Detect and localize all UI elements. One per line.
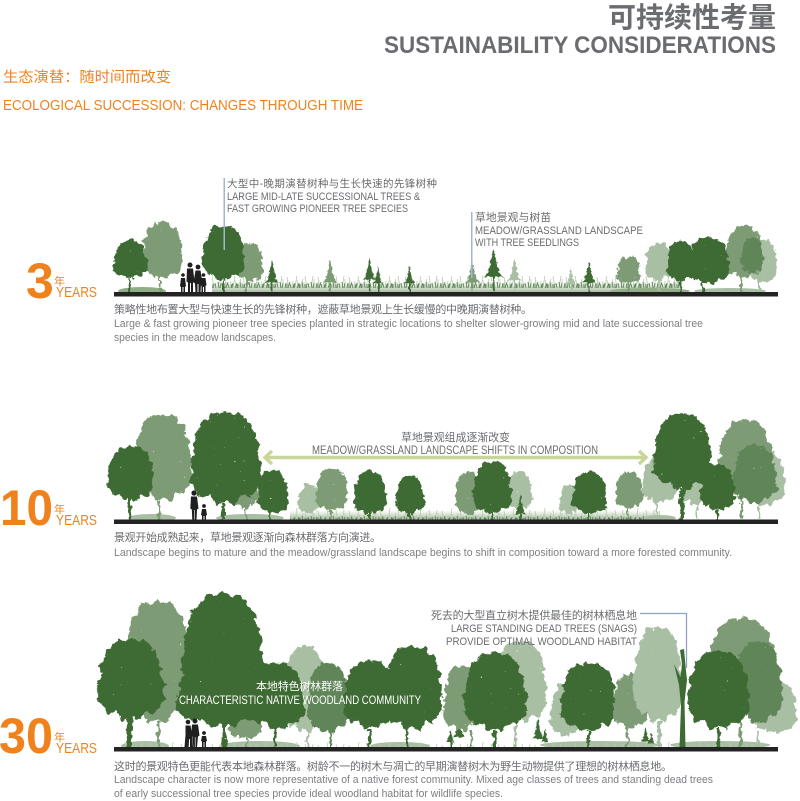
callout: meadow shift	[312, 430, 598, 457]
ground: 10 years	[114, 520, 778, 524]
year label: 10 years: YEARS	[56, 512, 97, 529]
title	[384, 2, 776, 59]
callout: standing dead trees: LARGE STANDING DEAD TREES (SNAGS)	[451, 623, 637, 635]
callout: large trees: LARGE MID-LATE SUCCESSIONAL TREES &	[227, 191, 421, 203]
caption: 30 years: 这时的景观特色更能代表本地森林群落。树龄不一的树木与凋亡的早期演替树木为野生动物提供了理想的树林栖息地。	[114, 759, 672, 773]
caption: 10 years: Landscape begins to mature and the meadow/grassland landscape begins to shift in composition toward a more forested community.	[114, 547, 732, 559]
title: 可持续性考量	[608, 2, 776, 33]
icon: dead snag tree	[674, 649, 687, 748]
callout: standing dead trees	[431, 608, 686, 668]
year label: 3 years: 年	[54, 274, 65, 288]
panel: 10 years	[0, 411, 785, 559]
trees: 30 years right cluster	[633, 617, 797, 748]
callout: native woodland: CHARACTERISTIC NATIVE WOODLAND COMMUNITY	[179, 693, 421, 707]
year label: 3 years: YEARS	[56, 284, 97, 301]
panel: 30 years	[0, 592, 797, 800]
meadow grass: 10 years	[128, 504, 676, 522]
year label: 3 years	[26, 253, 97, 309]
subtitle: ecological succession: ECOLOGICAL SUCCESSION: CHANGES THROUGH TIME	[3, 97, 363, 114]
trees: 3 years left cluster	[113, 222, 263, 293]
year label: 10 years: 年	[54, 502, 65, 516]
arrow: meadow shift	[265, 451, 646, 464]
caption: 30 years	[114, 759, 713, 800]
year label: 3 years: 3	[26, 253, 54, 309]
callout: meadow with seedlings: 草地景观与树苗	[475, 210, 551, 224]
callout: large trees: 大型中-晚期演替树种与生长快速的先锋树种	[227, 177, 437, 190]
subtitle: ecological succession: 生态演替：随时间而改变	[3, 69, 171, 86]
understory: 30 years	[120, 738, 770, 751]
callout: standing dead trees: PROVIDE OPTIMAL WOODLAND HABITAT	[446, 636, 637, 648]
year label: 10 years	[0, 480, 97, 536]
callout: meadow with seedlings: MEADOW/GRASSLAND LANDSCAPE	[475, 225, 643, 237]
title: SUSTAINABILITY CONSIDERATIONS	[384, 32, 776, 59]
trees: 10 years meadow	[298, 461, 643, 520]
people silhouette: 30 years	[184, 718, 207, 747]
callout: meadow shift: 草地景观组成逐渐改变	[401, 430, 510, 444]
year label: 30 years: 年	[54, 730, 65, 744]
year label: 10 years: 10	[0, 480, 53, 536]
meadow grass: 3 years	[118, 276, 766, 295]
caption: 3 years: species in the meadow landscapes.	[114, 332, 276, 344]
callout: large trees	[224, 177, 437, 250]
callout: native woodland	[179, 679, 421, 707]
callout: standing dead trees: 死去的大型直立树木提供最佳的树林栖息地	[431, 608, 637, 622]
year label: 30 years: 30	[0, 708, 53, 764]
trees: 10 years right cluster	[642, 413, 785, 520]
trees: 30 years left cluster	[97, 592, 443, 748]
ground: 3 years	[114, 292, 778, 296]
caption: 10 years	[114, 530, 732, 559]
caption: 3 years: Large & fast growing pioneer tree species planted in strategic locations to shelter slower-growing mid and late successional tree	[114, 318, 703, 330]
caption: 30 years: Landscape character is now more representative of a native forest community. Mixed age classes of trees and standing dead trees	[114, 774, 713, 786]
ground: 30 years	[114, 747, 778, 752]
tree seedlings: 3 years	[265, 249, 596, 292]
subtitle: ecological succession	[3, 69, 363, 114]
callout: native woodland: 本地特色树林群落	[256, 679, 343, 693]
trees: 30 years middle cluster	[443, 640, 655, 748]
trees: 3 years right cluster	[617, 225, 777, 293]
caption: 3 years: 策略性地布置大型与快速生长的先锋树种，遮蔽草地景观上生长缓慢的中晚期演替树种。	[114, 302, 532, 316]
caption: 10 years: 景观开始成熟起来，草地景观逐渐向森林群落方向演进。	[114, 530, 381, 544]
callout: large trees: FAST GROWING PIONEER TREE SPECIES	[227, 203, 408, 215]
panel: 3 years	[26, 177, 778, 344]
year label: 30 years	[0, 708, 97, 764]
trees: 10 years left cluster	[107, 411, 289, 520]
callout: meadow shift: MEADOW/GRASSLAND LANDSCAPE SHIFTS IN COMPOSITION	[312, 445, 598, 457]
year label: 30 years: YEARS	[56, 740, 97, 757]
caption: 3 years	[114, 302, 703, 344]
caption: 30 years: of early successional tree species provide ideal woodland habitat for wildlife species.	[114, 788, 503, 800]
callout: meadow with seedlings	[471, 210, 643, 278]
people silhouette: 3 years	[180, 262, 206, 293]
callout: meadow with seedlings: WITH TREE SEEDLINGS	[475, 237, 579, 249]
people silhouette: 10 years	[190, 490, 207, 520]
